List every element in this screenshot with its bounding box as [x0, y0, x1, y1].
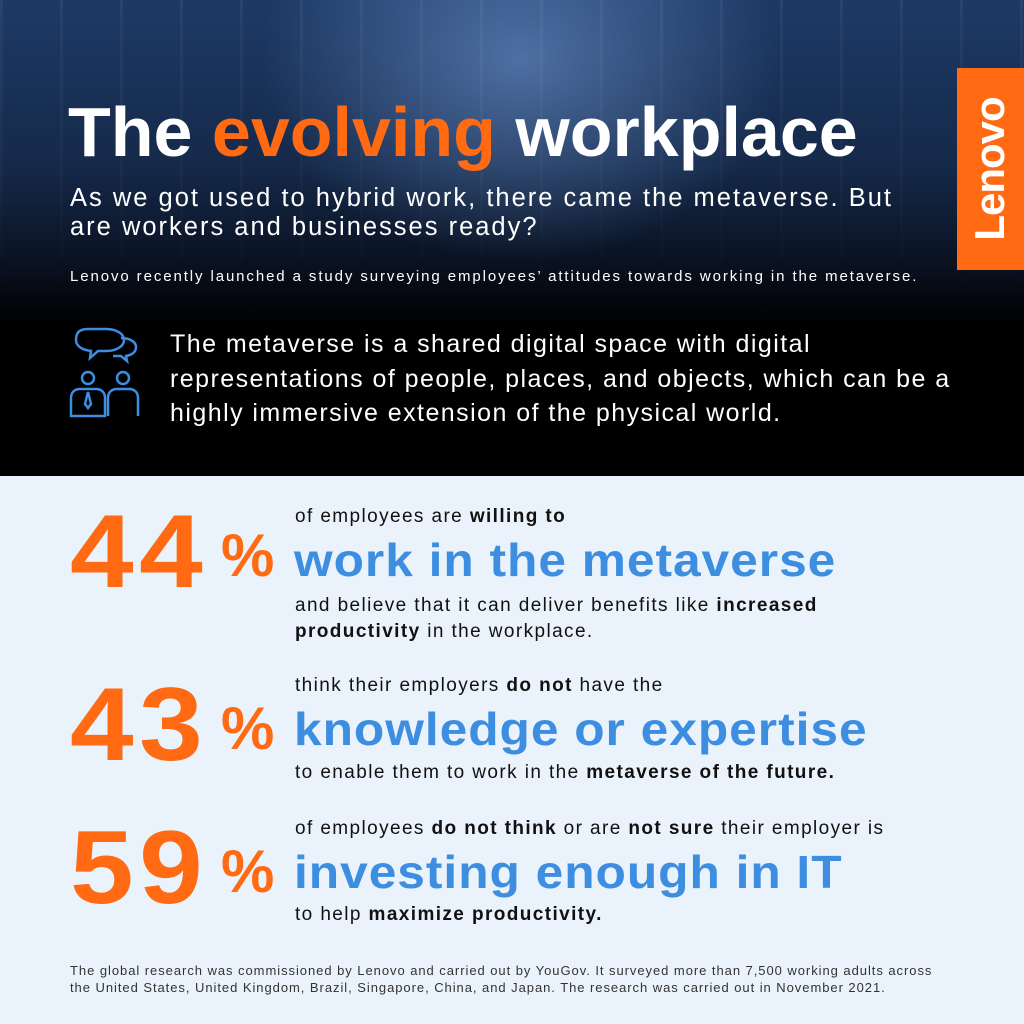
- stat 2: knowledge or expertise: [294, 703, 868, 755]
- stat 3: %: [221, 838, 274, 905]
- metaverse definition text: The metaverse is a shared digital space with digital: [170, 330, 811, 358]
- stat 2: 43: [70, 667, 208, 783]
- stat 2: [70, 667, 868, 783]
- metaverse definition text: [170, 330, 951, 427]
- stat 2: think their employers do not have the: [295, 675, 664, 696]
- subtitle: are workers and businesses ready?: [70, 213, 539, 241]
- footer note: The global research was commissioned by Lenovo and carried out by YouGov. It surveyed more than 7,500 working adults across: [70, 963, 932, 978]
- stat 2: to enable them to work in the metaverse of the future.: [295, 762, 835, 783]
- stat 1: %: [221, 522, 274, 589]
- logo: Lenovo: Lenovo: [966, 97, 1013, 241]
- stat 1: and believe that it can deliver benefits like increased: [295, 595, 818, 616]
- header background: [0, 0, 1024, 476]
- stat 1: productivity in the workplace.: [295, 621, 594, 642]
- stat 3: of employees do not think or are not sure their employer is: [295, 818, 884, 839]
- metaverse definition text: highly immersive extension of the physical world.: [170, 399, 782, 427]
- stat 3: [70, 810, 884, 926]
- stat 1: of employees are willing to: [295, 506, 566, 527]
- stat 3: investing enough in IT: [294, 846, 843, 898]
- subtitle: [70, 184, 893, 241]
- footer note: the United States, United Kingdom, Brazil, Singapore, China, and Japan. The research was carried out in November 2021.: [70, 980, 886, 995]
- title: The evolving workplace: [68, 93, 858, 171]
- logo: Lenovo: [957, 68, 1024, 270]
- stat 3: 59: [70, 810, 208, 926]
- stat 1: work in the metaverse: [294, 534, 836, 586]
- stat 3: to help maximize productivity.: [295, 904, 603, 925]
- stat 1: [70, 494, 836, 642]
- subtitle: As we got used to hybrid work, there came the metaverse. But: [70, 184, 893, 212]
- stat 1: 44: [70, 494, 208, 610]
- intro text: Lenovo recently launched a study surveying employees’ attitudes towards working in the metaverse.: [70, 268, 918, 285]
- metaverse definition text: representations of people, places, and objects, which can be a: [170, 364, 951, 392]
- icon: people chatting: [70, 328, 140, 418]
- stat 2: %: [221, 695, 274, 762]
- footer note: [70, 963, 932, 995]
